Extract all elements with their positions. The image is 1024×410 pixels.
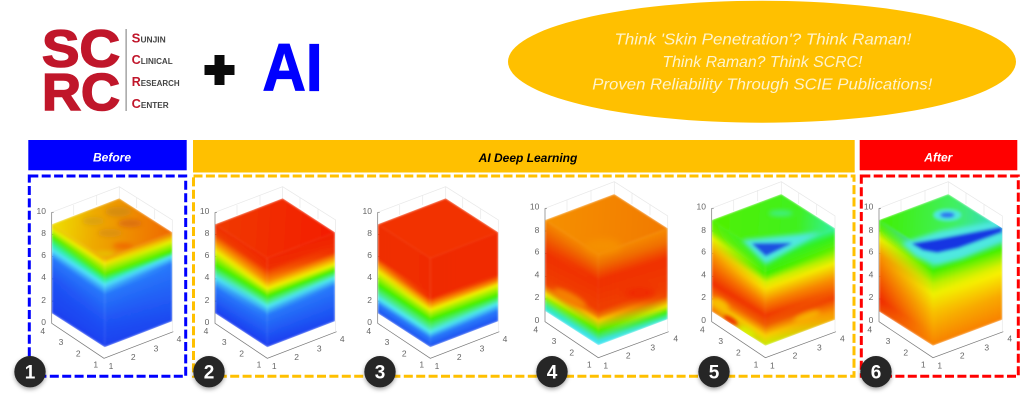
badge 2: 2 [204, 362, 214, 384]
logo letters SC: SC [42, 20, 120, 78]
logo name: Sunjin: SUNJIN [132, 31, 166, 45]
left face [378, 224, 430, 347]
top face [378, 198, 498, 258]
axes cube 5: 2 [736, 348, 741, 358]
axes cube 1: 3 [154, 344, 159, 354]
axes cube 5: 2 [701, 292, 706, 302]
faint cyan patch [769, 210, 793, 216]
panel frame: after [861, 176, 1018, 376]
top face [879, 194, 996, 242]
axes cube 6 [864, 182, 1012, 371]
top face [712, 194, 835, 244]
axes cube 5: 2 [793, 351, 798, 361]
blobs on lower faces [711, 296, 822, 340]
axes cube 2: 2 [294, 352, 299, 362]
badge 4 [536, 356, 568, 387]
dip: cyan halo [742, 232, 822, 264]
header bar red [860, 140, 1017, 170]
axes cube 1: 3 [59, 337, 64, 347]
axes cube 4: 3 [552, 336, 557, 346]
left face [215, 224, 267, 347]
callout line 2: Think Raman? Think SCRC! [662, 54, 863, 71]
surface cube 2 [215, 198, 335, 347]
logo name: Center: CENTER [132, 97, 169, 111]
axes cube 1: 1 [109, 361, 114, 371]
chart: cube 3 [363, 187, 508, 371]
axes cube 6: 1 [921, 359, 926, 369]
surface cube 1 [52, 198, 172, 347]
header: After [860, 140, 1017, 170]
axes cube 1: 4 [177, 334, 182, 344]
logo letters RC: RC [42, 64, 120, 122]
top face [215, 198, 335, 258]
axes cube 2: 4 [205, 272, 210, 282]
axes cube 2 [200, 187, 345, 371]
badge 3: 3 [375, 362, 385, 384]
axes cube 1: 6 [41, 250, 46, 260]
badge 5: 5 [709, 362, 720, 384]
axes cube 1: 2 [41, 295, 46, 305]
axes cube 3: 1 [435, 361, 440, 371]
badge 4: 4 [547, 362, 558, 384]
axes cube 6: 2 [869, 292, 874, 302]
callout ellipse [508, 1, 1016, 123]
chart: cube 6 after [864, 182, 1012, 371]
logo divider [126, 29, 127, 111]
axes cube 2: 3 [222, 337, 227, 347]
axes cube 6: 4 [1007, 333, 1012, 343]
header bar blue [28, 140, 187, 170]
axes cube 1: 2 [131, 352, 136, 362]
axes cube 3: 4 [367, 272, 372, 282]
band: cyan halo [902, 220, 1004, 264]
surface cube 6 [879, 194, 1004, 346]
axes cube 5: 0 [701, 315, 706, 325]
orange patches [552, 239, 656, 311]
axes cube 4: 1 [587, 359, 592, 369]
axes cube 2: 4 [204, 326, 209, 336]
right face [430, 232, 498, 347]
axes cube 6: 0 [869, 315, 874, 325]
axes cube 4: 0 [535, 315, 540, 325]
axes cube 6: 2 [903, 348, 908, 358]
axes cube 2: 3 [317, 344, 322, 354]
axes cube 6: 8 [869, 225, 874, 235]
axes cube 2: 1 [272, 361, 277, 371]
axes cube 2: 2 [239, 348, 244, 358]
axes cube 1: 1 [93, 360, 98, 370]
chart: cube 5 [697, 182, 845, 371]
axes cube 6: 10 [864, 202, 874, 212]
chart: cube 2 [200, 187, 345, 371]
axes cube 2: 1 [257, 360, 262, 370]
badge 3 [364, 356, 396, 387]
axes cube 6: 3 [886, 336, 891, 346]
logo: SCRC [42, 20, 180, 122]
top face [52, 198, 172, 258]
axes cube 3: 3 [480, 344, 485, 354]
axes cube 2: 0 [205, 317, 210, 327]
patch: blue core [940, 212, 954, 218]
header bar orange [193, 140, 855, 172]
axes cube 4: 2 [626, 351, 631, 361]
right face [267, 232, 335, 347]
right face [105, 232, 172, 347]
axes cube 6: 3 [984, 342, 989, 352]
axes cube 3: 4 [366, 326, 371, 336]
panel frame: before [29, 176, 186, 376]
axes cube 2: 4 [340, 334, 345, 344]
left face [712, 220, 765, 346]
axes cube 3: 10 [363, 206, 372, 216]
axes cube 6: 4 [869, 270, 874, 280]
axes cube 5: 3 [718, 336, 723, 346]
badge 5 [698, 356, 730, 387]
axes cube 3: 0 [367, 317, 372, 327]
axes cube 6: 2 [960, 351, 965, 361]
axes cube 5: 1 [770, 361, 775, 371]
axes cube 1: 4 [40, 326, 45, 336]
chart: cube 4 [530, 182, 678, 371]
axes cube 4: 4 [673, 333, 678, 343]
axes cube 4: 4 [535, 270, 540, 280]
axes cube 2: 8 [205, 228, 210, 238]
badge 2 [193, 356, 225, 387]
axes cube 2: 2 [205, 295, 210, 305]
badge 1 [14, 356, 46, 387]
ellipse shape [508, 1, 1016, 123]
axes cube 5: 1 [754, 359, 759, 369]
axes cube 5: 4 [701, 270, 706, 280]
axes cube 1: 10 [37, 206, 46, 216]
right face [765, 228, 835, 346]
right face [933, 228, 1002, 346]
axes cube 4: 4 [533, 324, 538, 334]
axes cube 3: 2 [367, 295, 372, 305]
axes cube 1 [37, 187, 182, 371]
axes cube 3: 1 [419, 360, 424, 370]
axes cube 3: 2 [402, 348, 407, 358]
axes cube 1: 2 [76, 348, 81, 358]
header label: AI Deep Learning [478, 151, 578, 165]
header: AI Deep Learning [193, 140, 855, 172]
axes cube 2: 6 [205, 250, 210, 260]
axes cube 4 [530, 182, 678, 371]
header label: Before [93, 150, 131, 164]
axes cube 4: 10 [530, 202, 540, 212]
axes cube 4: 6 [535, 247, 540, 257]
axes cube 2: 10 [200, 206, 210, 216]
icon: plus [204, 55, 234, 85]
axes cube 5: 8 [701, 225, 706, 235]
axes cube 3: 6 [367, 250, 372, 260]
panel frame: AI deep learning [194, 176, 854, 376]
axes cube 4: 1 [603, 361, 608, 371]
left face [879, 220, 933, 346]
chart: cube 1 before [37, 187, 182, 371]
axes cube 5 [697, 182, 845, 371]
axes cube 4: 2 [569, 348, 574, 358]
AI wordmark: AI [262, 30, 322, 106]
axes cube 3: 2 [457, 352, 462, 362]
axes cube 1: 8 [41, 228, 46, 238]
top face [545, 194, 668, 254]
axes cube 3: 4 [503, 334, 508, 344]
callout line 1: Think 'Skin Penetration'? Think Raman! [614, 32, 912, 48]
badge 1: 1 [25, 362, 36, 384]
logo name: Clinical: CLINICAL [132, 53, 173, 67]
surface cube 3 [378, 198, 498, 347]
axes cube 5: 10 [697, 202, 706, 212]
axes cube 5: 3 [817, 342, 822, 352]
badge 6: 6 [871, 362, 881, 384]
surface cube 4 [545, 194, 668, 345]
surface cube 5 [711, 194, 835, 346]
band: blue core [912, 227, 1002, 252]
badge 6 [860, 356, 892, 387]
axes cube 6: 6 [869, 247, 874, 257]
axes cube 3: 8 [367, 228, 372, 238]
axes cube 4: 8 [535, 225, 540, 235]
axes cube 4: 2 [535, 292, 540, 302]
left face [52, 224, 105, 347]
left face [545, 220, 598, 345]
axes cube 5: 4 [840, 333, 845, 343]
patch: cyan halo [933, 209, 961, 221]
axes cube 5: 6 [701, 247, 706, 257]
axes cube 1: 4 [41, 272, 46, 282]
header label: After [923, 150, 954, 164]
callout line 3: Proven Reliability Through SCIE Publications! [592, 77, 933, 94]
dip: blue core [752, 243, 792, 256]
right face [598, 228, 668, 345]
axes cube 6: 1 [937, 361, 942, 371]
logo name: Research: RESEARCH [132, 75, 180, 89]
header: Before [28, 140, 187, 170]
axes cube 3 [363, 187, 508, 371]
axes cube 6: 4 [867, 324, 872, 334]
axes cube 1: 0 [41, 317, 46, 327]
axes cube 4: 3 [650, 342, 655, 352]
axes cube 3: 3 [385, 337, 390, 347]
axes cube 5: 4 [700, 324, 705, 334]
